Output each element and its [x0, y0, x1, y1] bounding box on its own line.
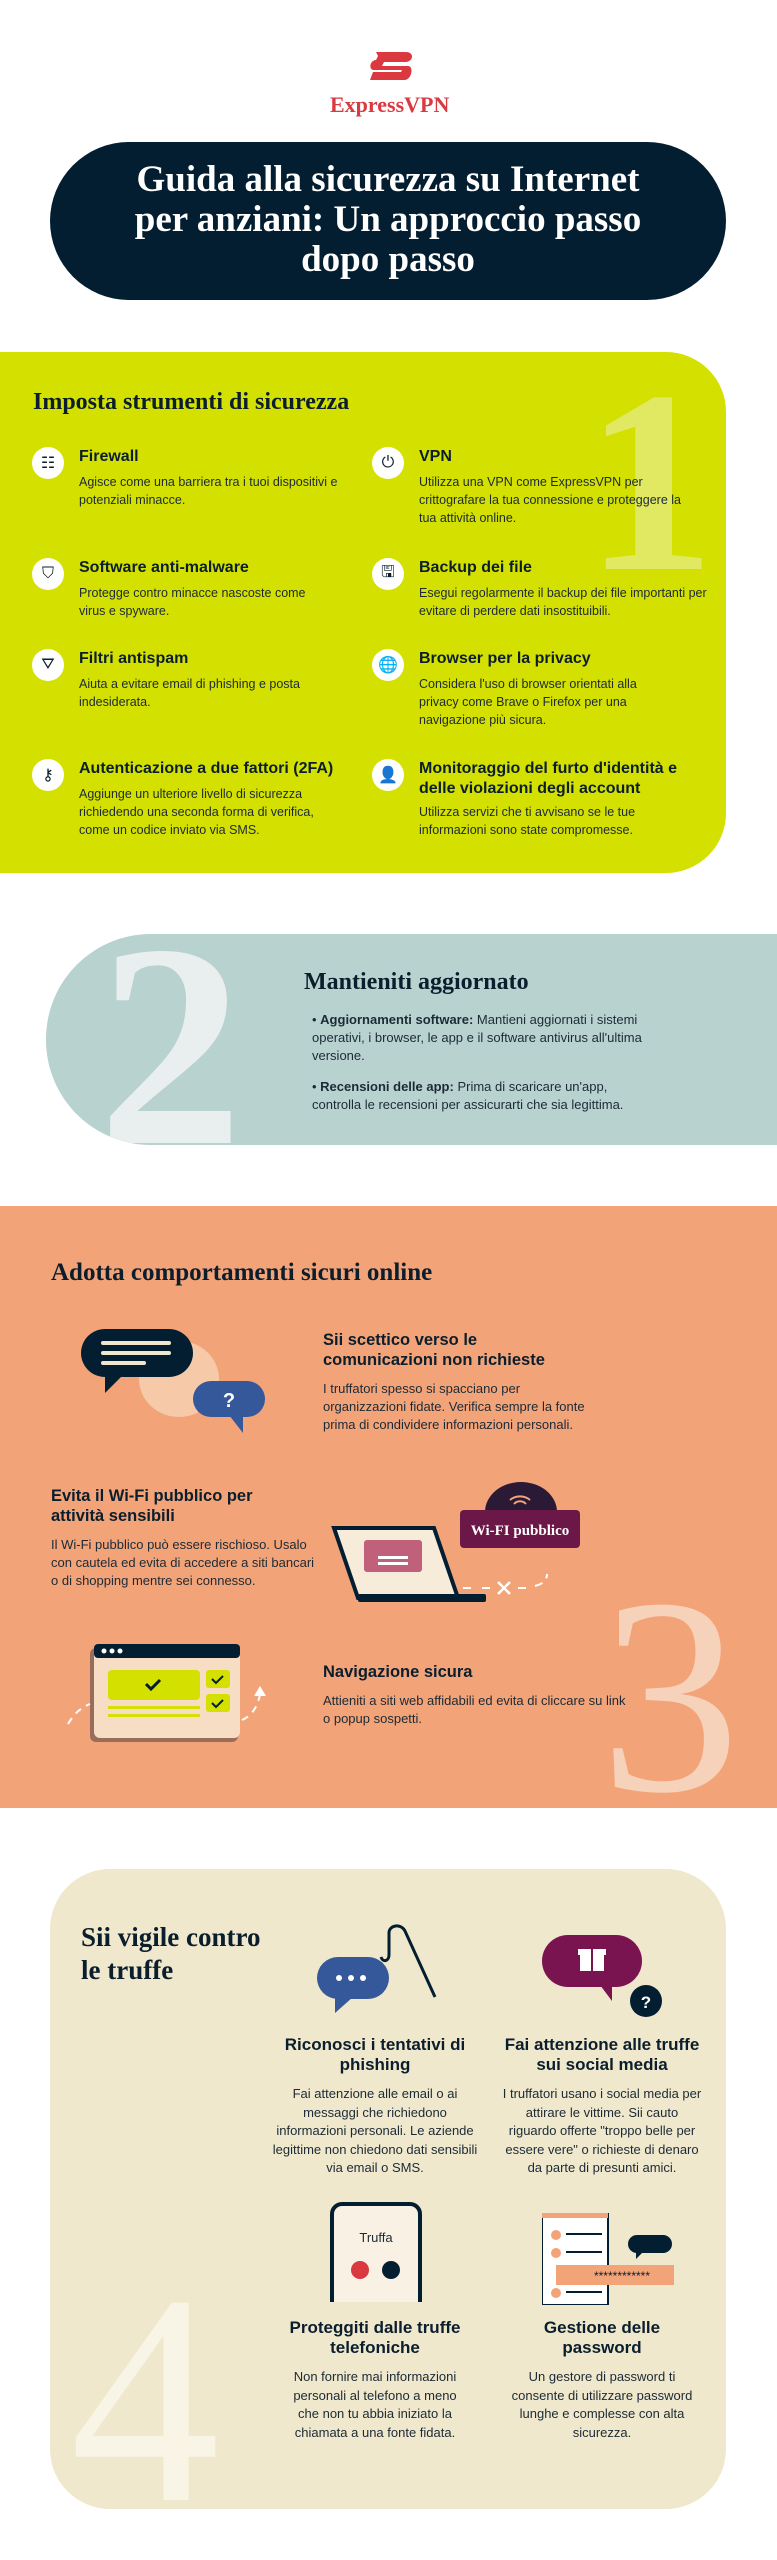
item: antispam: [32, 649, 300, 709]
title: [50, 142, 726, 300]
item: phishing: Riconosci i tentativi di: [285, 2035, 465, 2054]
item: antispam: Filtri antispam: [79, 650, 188, 667]
icon: social gift: [542, 1935, 662, 2017]
logo: [330, 52, 450, 117]
item: phishing: [273, 2035, 477, 2175]
icon: password manager: [542, 2213, 674, 2305]
item: phishing: phishing: [340, 2055, 410, 2074]
item: firewall: [32, 447, 337, 507]
item: identity monitoring: Monitoraggio del furto d'identità e delle violazioni degli account: [419, 760, 677, 797]
bullet list: [312, 1012, 642, 1112]
item: password management: password: [562, 2338, 642, 2357]
item: identity monitoring: [372, 759, 677, 837]
text: skeptical: comunicazioni non richieste: [323, 1351, 545, 1369]
text: public wifi: attività sensibili: [51, 1507, 175, 1525]
item: antispam: Aiuta a evitare email di phishing e posta indesiderata.: [79, 677, 300, 709]
icon: social gift: ?: [641, 1993, 651, 2012]
icon: laptop with wifi: Wi-FI pubblico: [471, 1523, 569, 1539]
text: safe browsing: Attieniti a siti web affidabili ed evita di cliccare su link o popup sospetti.: [323, 1693, 626, 1726]
text: public wifi: Il Wi-Fi pubblico può essere rischioso. Usalo con cautela ed evita di accedere a siti bancari o di shopping mentre sei connesso.: [51, 1537, 314, 1588]
item: phishing: Fai attenzione alle email o ai messaggi che richiedono informazioni personali. Le aziende legittime non chiedono dati sensibili via email o SMS.: [273, 2086, 477, 2175]
item: phone scams: [290, 2318, 460, 2440]
item: social media: [503, 2035, 701, 2175]
item: vpn: VPN: [419, 448, 452, 465]
item: privacy browser: Considera l'uso di browser orientati alla privacy come Brave o Firefox per una navigazione più sicura.: [419, 677, 637, 727]
panel: step 3 behaviours: [0, 1206, 777, 1808]
panel: step 1 tools: [0, 352, 726, 873]
title: dopo passo: [301, 239, 475, 280]
title: Guida alla sicurezza su Internet: [137, 159, 639, 200]
item: password management: Un gestore di password ti consente di utilizzare password lunghe e complesse con alta sicurezza.: [512, 2369, 692, 2440]
item: backup: [372, 558, 707, 618]
item: firewall: ☷: [41, 455, 55, 472]
item: vpn: Utilizza una VPN come ExpressVPN per crittografare la tua connessione e proteggere la tua attività online.: [419, 475, 681, 525]
text: safe browsing: Navigazione sicura: [323, 1663, 472, 1681]
heading: Sii vigile contro: [81, 1922, 260, 1952]
icon: chat bubbles: ?: [223, 1390, 235, 1412]
item: backup: Backup dei file: [419, 559, 532, 576]
item: 2FA: [32, 759, 333, 837]
item: antispam: ⛛: [41, 656, 55, 673]
item: 2FA: ⚷: [42, 767, 54, 784]
item: 2FA: Aggiunge un ulteriore livello di sicurezza richiedendo una seconda forma di verifica, come un codice inviato via SMS.: [79, 787, 314, 837]
item: password management: Gestione delle: [544, 2318, 660, 2337]
big number 1: 1: [585, 338, 715, 626]
item: social media: I truffatori usano i social media per attirare le vittime. Sii cauto riguardo offerte "troppo belle per essere vere" o richieste di denaro da parte di presunti amici.: [503, 2086, 701, 2175]
item: privacy browser: Browser per la privacy: [419, 650, 591, 667]
item: backup: Esegui regolarmente il backup dei file importanti per evitare di perdere dati insostituibili.: [419, 586, 707, 618]
icon: phone call: [330, 2202, 422, 2302]
item: 2FA: Autenticazione a due fattori (2FA): [79, 760, 333, 777]
item: firewall: Agisce come una barriera tra i tuoi dispositivi e potenziali minacce.: [79, 475, 337, 507]
bullet list: • Recensioni delle app: Prima di scaricare un'app, controlla le recensioni per assicurarti che sia legittima.: [312, 1079, 623, 1112]
item: phone scams: telefoniche: [330, 2338, 420, 2357]
item: vpn: [372, 447, 681, 525]
item: anti-malware: ⛉: [42, 565, 54, 582]
panel: step 2 updates: [46, 934, 777, 1145]
item: backup: 🖫: [381, 564, 395, 580]
item: anti-malware: Software anti-malware: [79, 559, 249, 576]
item: privacy browser: [372, 649, 637, 727]
text: safe browsing: [323, 1663, 626, 1726]
bullet list: • Aggiornamenti software: Mantieni aggiornati i sistemi operativi, i browser, le app e il software antivirus all'ultima versione.: [312, 1012, 642, 1063]
icon: password manager: ************: [594, 2269, 650, 2283]
heading: Imposta strumenti di sicurezza: [33, 389, 349, 415]
icon: chat bubbles: [81, 1329, 265, 1433]
heading: [81, 1922, 260, 1985]
item: vpn: ⏻: [382, 454, 394, 471]
icon: safe browser: [67, 1644, 266, 1742]
item: identity monitoring: 👤: [378, 767, 398, 784]
icon: laptop with wifi: [331, 1482, 580, 1602]
heading: le truffe: [81, 1955, 173, 1985]
title: per anziani: Un approccio passo: [135, 199, 641, 240]
item: anti-malware: [32, 558, 306, 618]
heading: Adotta comportamenti sicuri online: [51, 1259, 432, 1286]
heading: Mantieniti aggiornato: [304, 969, 529, 995]
item: social media: sui social media: [536, 2055, 668, 2074]
text: public wifi: Evita il Wi-Fi pubblico per: [51, 1487, 253, 1505]
text: skeptical: I truffatori spesso si spacciano per organizzazioni fidate. Verifica sempre la fonte prima di condividere informazioni personali.: [323, 1381, 585, 1432]
item: privacy browser: 🌐: [378, 657, 398, 674]
item: anti-malware: Protegge contro minacce nascoste come virus e spyware.: [79, 586, 306, 618]
item: firewall: Firewall: [79, 448, 139, 465]
item: identity monitoring: Utilizza servizi che ti avvisano se le tue informazioni sono state compromesse.: [419, 805, 635, 837]
item: social media: Fai attenzione alle truffe: [505, 2035, 699, 2054]
logo: ExpressVPN: [330, 92, 449, 117]
icon: phishing hook: [317, 1924, 436, 2013]
text: skeptical: Sii scettico verso le: [323, 1331, 477, 1349]
text: public wifi: [51, 1487, 314, 1588]
panel: step 4 scams: [50, 1869, 726, 2509]
item: phone scams: Proteggiti dalle truffe: [290, 2318, 460, 2337]
item: password management: [512, 2318, 692, 2440]
text: skeptical: [323, 1331, 585, 1432]
item: phone scams: Non fornire mai informazioni personali al telefono a meno che non tu abbia iniziato la chiamata a una fonte fidata.: [293, 2369, 457, 2440]
icon: phone call: Truffa: [359, 2230, 393, 2245]
